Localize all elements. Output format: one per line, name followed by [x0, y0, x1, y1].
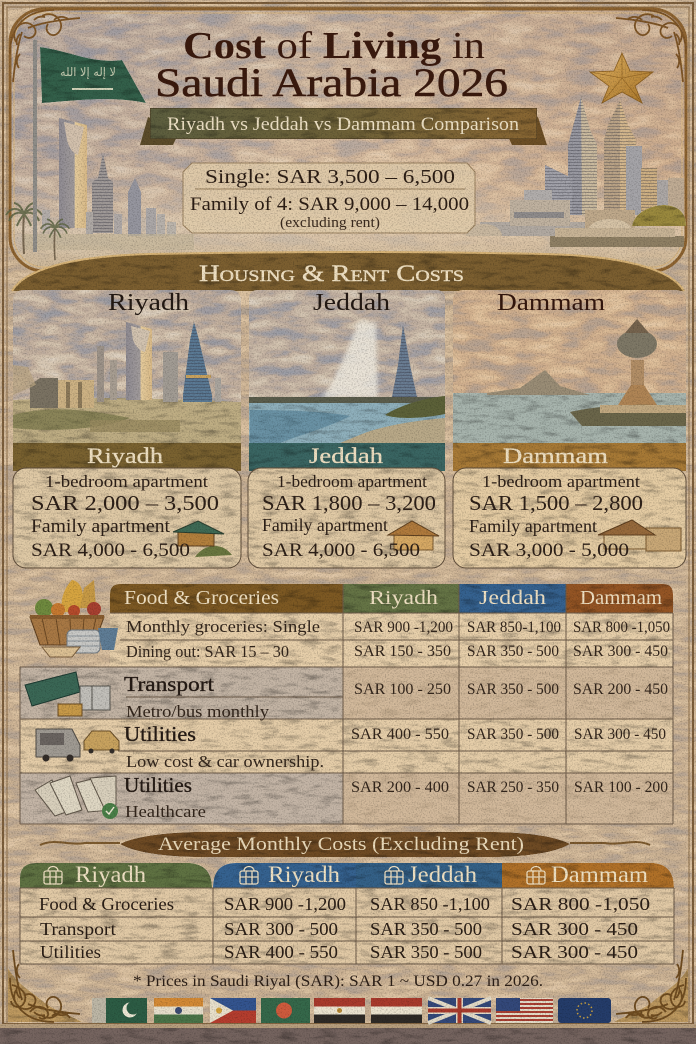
- Dammam illustration: [453, 290, 686, 446]
- table header: Food & Groceries: [124, 587, 279, 609]
- utilities row: SAR 300 - 450: [574, 726, 666, 743]
- bottom dark strip: [0, 1028, 696, 1044]
- title: [155, 25, 508, 105]
- transport row: Metro/bus monthly: [126, 702, 270, 721]
- flag: European Union: [558, 998, 611, 1023]
- Riyadh heading: Riyadh: [108, 290, 189, 316]
- food and groceries row: SAR 900 -1,200: [354, 619, 453, 636]
- row: transport: SAR 300 - 450: [511, 919, 638, 939]
- row: utilities: SAR 350 - 500: [370, 942, 482, 962]
- Jeddah price card: SAR 1,800 – 3,200: [262, 491, 436, 515]
- Dammam band: Dammam: [503, 443, 608, 468]
- Jeddah band: [249, 443, 445, 471]
- healthcare row: SAR 200 - 400: [351, 779, 449, 796]
- Jeddah band: Jeddah: [309, 443, 383, 468]
- corner ornament bottom left: [8, 950, 82, 1022]
- cost summary box: Family of 4: SAR 9,000 – 14,000: [190, 194, 469, 215]
- hero sky: [10, 9, 686, 271]
- corner ornament top left: [10, 10, 80, 82]
- row: transport: SAR 300 - 500: [224, 919, 338, 939]
- row: utilities: Utilities: [40, 942, 101, 962]
- hero panel: [6, 9, 686, 291]
- panel: average monthly cost table: [20, 862, 674, 964]
- panel: Dammam housing: [453, 290, 686, 568]
- cost summary box: [183, 163, 475, 233]
- header Riyadh blue: [213, 862, 356, 888]
- palm trees: [6, 203, 69, 260]
- Dammam price card: [453, 468, 686, 568]
- Saudi flag: لا إله إلا الله: [60, 65, 116, 79]
- right skyline: [466, 97, 686, 247]
- row: transport: [40, 919, 638, 939]
- healthcare row: Utilities: [124, 773, 192, 797]
- healthcare row: Healthcare: [125, 802, 206, 821]
- table header: [110, 584, 673, 613]
- row: food and groceries: SAR 800 -1,050: [511, 894, 650, 914]
- title: Saudi Arabia 2026: [155, 60, 508, 105]
- Dammam price card: SAR 1,500 – 2,800: [469, 491, 643, 515]
- icon: documents: [35, 776, 118, 819]
- dome buildings: [466, 219, 684, 247]
- Jeddah illustration: [249, 290, 445, 446]
- row: food and groceries: SAR 850 -1,100: [370, 894, 490, 914]
- food and groceries row: Dining out: SAR 15 – 30: [126, 642, 289, 661]
- grid lines: [20, 584, 673, 824]
- Dammam heading: Dammam: [497, 290, 605, 316]
- header Riyadh blue: Riyadh: [268, 862, 341, 887]
- utilities row: SAR 400 - 550: [351, 726, 449, 743]
- food and groceries row: SAR 150 - 350: [354, 643, 451, 660]
- table header: Dammam: [580, 587, 662, 609]
- table header: Riyadh: [369, 587, 438, 609]
- header Jeddah: [356, 862, 502, 888]
- Jeddah price card: SAR 4,000 - 6,500: [262, 540, 420, 561]
- transport row: [124, 672, 668, 721]
- healthcare row: SAR 250 - 350: [467, 779, 559, 796]
- utilities row: Low cost & car ownership.: [126, 752, 324, 771]
- Riyadh price card: SAR 4,000 - 6,500: [31, 540, 190, 561]
- subtitle ribbon: [140, 108, 547, 145]
- header Dammam: Dammam: [551, 862, 648, 887]
- row: food and groceries: Food & Groceries: [39, 894, 174, 914]
- table body: [20, 888, 674, 964]
- flag: Philippines: [210, 998, 256, 1023]
- flags row: [92, 998, 611, 1023]
- section banner: average monthly costs: Average Monthly Costs (Excluding Rent): [158, 834, 524, 855]
- Riyadh band: [13, 443, 241, 471]
- Jeddah price card: [248, 468, 445, 568]
- flag: Yemen: [371, 998, 422, 1023]
- row: transport: SAR 350 - 500: [370, 919, 482, 939]
- healthcare row: [124, 773, 668, 821]
- left skyline: [6, 118, 194, 260]
- header Dammam: [502, 862, 674, 888]
- title: Cost of Living in: [183, 25, 485, 67]
- food and groceries row: SAR 350 - 500: [467, 643, 559, 660]
- flag: United Kingdom: [428, 998, 491, 1023]
- subtitle ribbon: Riyadh vs Jeddah vs Dammam Comparison: [167, 114, 520, 135]
- Jeddah heading: Jeddah: [313, 290, 390, 316]
- corner ornament top right: [616, 10, 686, 82]
- table header: Jeddah: [479, 587, 546, 609]
- flag: Bangladesh: [261, 998, 310, 1023]
- Dammam price card: 1-bedroom apartment: [482, 472, 640, 491]
- Dammam price card: Family apartment: [469, 516, 597, 536]
- transport row: Transport: [124, 672, 214, 696]
- row: utilities: [40, 942, 638, 962]
- row: transport: Transport: [40, 919, 116, 939]
- flag pole: [33, 40, 37, 252]
- food and groceries row: Monthly groceries: Single: [126, 617, 320, 636]
- food and groceries row: SAR 850-1,100: [467, 619, 561, 636]
- healthcare row: SAR 100 - 200: [574, 779, 668, 796]
- utilities row: SAR 350 - 500: [467, 726, 559, 743]
- utilities row: [124, 722, 666, 771]
- row: food and groceries: [39, 894, 650, 914]
- header Riyadh green: Riyadh: [75, 862, 147, 887]
- Jeddah price card: Family apartment: [262, 515, 388, 535]
- section banner: housing and rent costs: Housing & Rent Costs: [199, 261, 464, 286]
- Riyadh price card: Family apartment: [31, 516, 171, 537]
- house icon: [598, 520, 681, 551]
- section banner: average monthly costs: [40, 832, 650, 857]
- grid lines: [20, 888, 674, 964]
- Dammam price card: SAR 3,000 - 5,000: [469, 540, 629, 561]
- row: food and groceries: SAR 900 -1,200: [224, 894, 346, 914]
- utilities row: Utilities: [124, 722, 196, 746]
- flag: Pakistan: [92, 998, 147, 1023]
- header Riyadh green: [20, 862, 212, 888]
- panel: Riyadh housing: [13, 290, 241, 568]
- Riyadh band: Riyadh: [87, 443, 163, 468]
- flag: United States: [496, 998, 553, 1023]
- Riyadh illustration: [13, 290, 241, 446]
- transport row: SAR 350 - 500: [467, 681, 559, 698]
- icon: transit pass: [25, 672, 110, 716]
- trees: [632, 205, 686, 226]
- Dammam band: [453, 443, 686, 471]
- transport row: SAR 100 - 250: [354, 681, 451, 698]
- food and groceries row: [126, 617, 670, 661]
- icon: van and car: [36, 729, 119, 762]
- icon: grocery basket: [30, 580, 118, 657]
- food and groceries row: SAR 800 -1,050: [573, 619, 670, 636]
- table rows: [20, 613, 673, 824]
- transport row: SAR 200 - 450: [573, 681, 668, 698]
- Riyadh price card: [13, 468, 241, 568]
- kingdom tower: [59, 118, 87, 228]
- cost summary box: (excluding rent): [280, 215, 380, 231]
- flag: India: [154, 998, 203, 1023]
- corner ornament bottom right: [614, 950, 688, 1022]
- flag: Egypt: [314, 998, 365, 1023]
- Riyadh price card: SAR 2,000 – 3,500: [31, 491, 219, 515]
- header Jeddah: Jeddah: [408, 862, 478, 887]
- food and groceries row: SAR 300 - 450: [573, 643, 668, 660]
- section banner: housing and rent costs: [12, 252, 684, 291]
- Saudi flag: [40, 47, 146, 103]
- cost summary box: Single: SAR 3,500 – 6,500: [205, 166, 455, 188]
- Jeddah price card: 1-bedroom apartment: [277, 472, 427, 491]
- house icon: [173, 521, 232, 557]
- gold star: [590, 53, 653, 103]
- panel: category cost table: [20, 580, 673, 824]
- row: utilities: SAR 400 - 550: [224, 942, 338, 962]
- house icon: [388, 521, 439, 550]
- Riyadh price card: 1-bedroom apartment: [45, 472, 208, 491]
- row: utilities: SAR 300 - 450: [511, 942, 638, 962]
- panel: Jeddah housing: [248, 290, 445, 568]
- footnote: * Prices in Saudi Riyal (SAR): SAR 1 ~ USD 0.27 in 2026.: [133, 973, 543, 990]
